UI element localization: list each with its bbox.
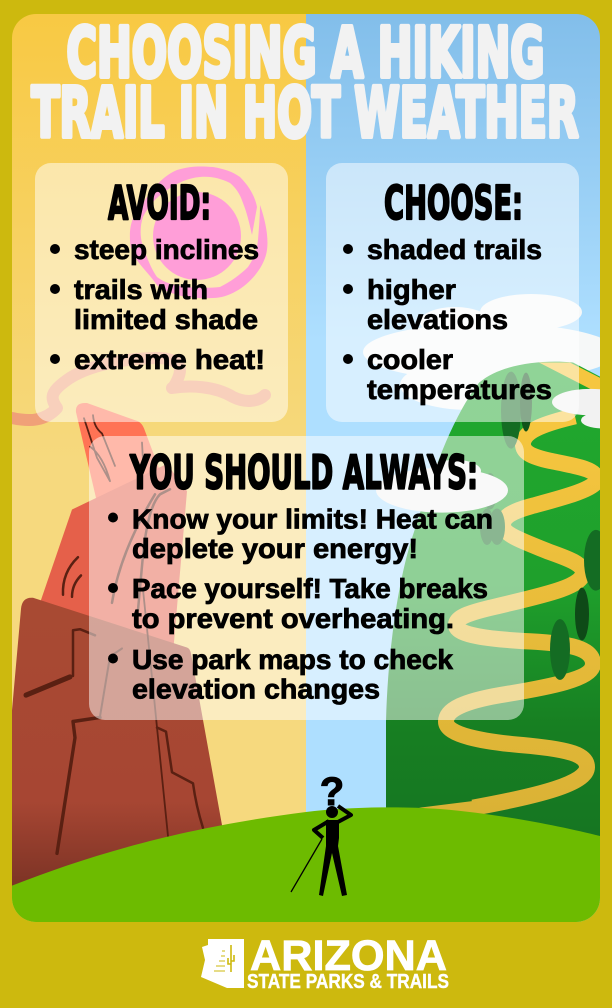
desert sky (12, 14, 306, 922)
mountain: upper peak (76, 403, 160, 506)
logo: arizona state parks and trails: ARIZONA (250, 932, 447, 980)
choose text block: elevations (367, 304, 508, 335)
icon: arizona state shape (201, 939, 244, 988)
choose text block: cooler (367, 344, 453, 375)
always text block: Know your limits! Heat can (132, 504, 493, 534)
clouds over hill (376, 389, 612, 513)
mountain: middle rock (40, 464, 187, 654)
panel: avoid background (35, 163, 288, 422)
icon: hiker with question mark (291, 770, 351, 896)
trees (480, 372, 608, 680)
always text block: elevation changes (132, 674, 380, 704)
avoid text block: trails with (74, 274, 208, 305)
mountain cracks (26, 415, 203, 853)
always text block (108, 446, 493, 704)
blue sky (306, 14, 600, 922)
avoid text block: limited shade (74, 304, 258, 335)
choose text block (343, 176, 552, 405)
winding trail (419, 362, 600, 816)
panel: always background (89, 436, 524, 720)
title (32, 14, 578, 154)
heat wave squiggle (12, 358, 265, 420)
avoid text block: steep inclines (74, 234, 259, 265)
logo: arizona state parks and trails (201, 932, 449, 993)
ground grass (11, 807, 600, 922)
logo: arizona state parks and trails: STATE PARKS & TRAILS (247, 971, 449, 993)
always text block: to prevent overheating. (132, 603, 454, 634)
green hill (386, 362, 600, 846)
heading: avoid: AVOID: (108, 176, 211, 230)
heading: choose: CHOOSE: (384, 176, 523, 230)
always text block: Use park maps to check (132, 644, 453, 675)
clouds behind hill (363, 294, 612, 410)
always text block: deplete your energy! (132, 533, 418, 564)
choose text block: shaded trails (367, 234, 542, 265)
avoid text block (50, 176, 265, 375)
always text block: Pace yourself! Take breaks (132, 573, 488, 604)
mountain: front rock (11, 598, 224, 897)
mountain (11, 403, 224, 897)
choose text block: temperatures (367, 374, 552, 405)
icon: sun (130, 166, 267, 298)
choose text block: higher (367, 274, 456, 305)
avoid text block: extreme heat! (74, 344, 265, 375)
hill with trail and trees (376, 362, 612, 846)
panel: choose background (326, 163, 579, 422)
icon: hiker with question mark: ? (320, 770, 344, 814)
